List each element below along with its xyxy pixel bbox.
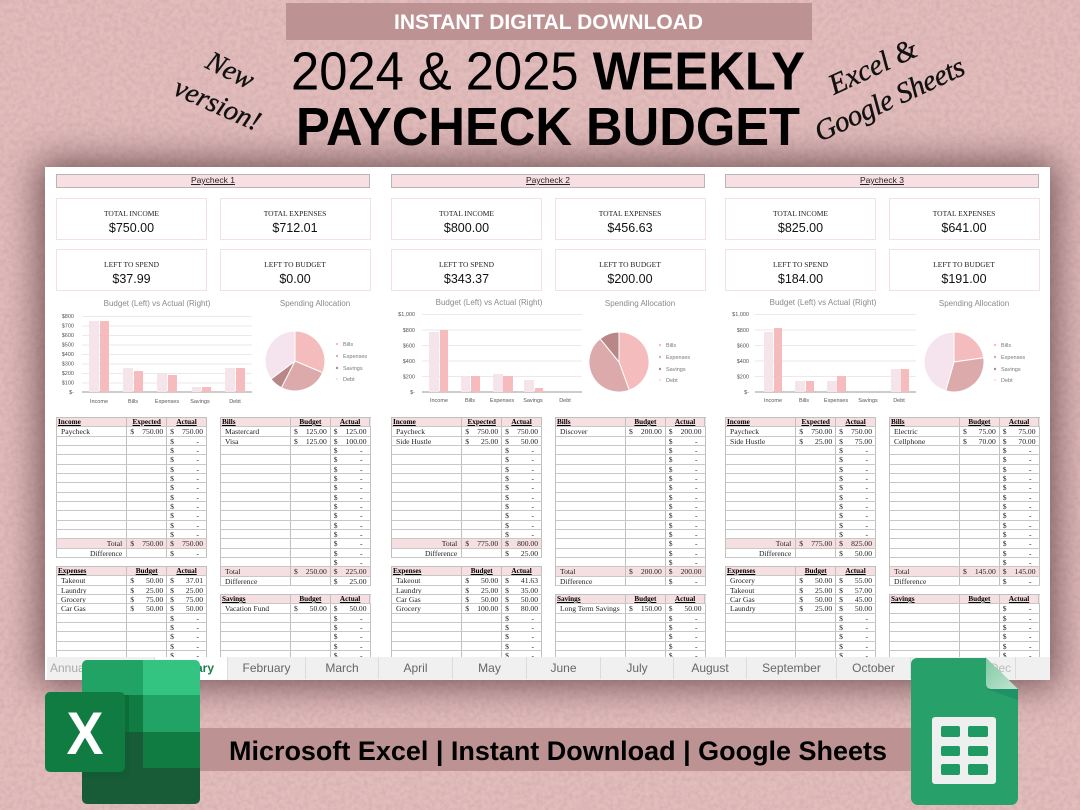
sheet tabs: September xyxy=(762,661,821,675)
charts: budget bars and spending pie: Savings xyxy=(343,366,363,372)
heading: paycheck 2 xyxy=(391,174,705,188)
charts: budget bars and spending pie: Expenses xyxy=(666,355,690,361)
kpi: total income: $750.00 xyxy=(109,221,154,235)
icon: microsoft excel: X xyxy=(66,700,104,767)
footer band: product line: Microsoft Excel | Instant Download | Google Sheets xyxy=(229,736,887,766)
charts: budget bars and spending pie: $600 xyxy=(62,333,74,339)
icon: microsoft excel xyxy=(45,660,200,804)
table: bills xyxy=(220,417,370,586)
charts: budget bars and spending pie: $- xyxy=(744,390,749,396)
table: income: Actual xyxy=(511,418,532,426)
table: savings xyxy=(889,594,1040,660)
charts: budget bars and spending pie: Debt xyxy=(1001,378,1013,384)
charts: budget bars and spending pie: Savings xyxy=(523,398,543,404)
table: savings xyxy=(555,594,706,660)
sheet tabs: March xyxy=(325,661,359,675)
charts: budget bars and spending pie: Budget (Left) vs Actual (Right) xyxy=(436,298,543,307)
table: expenses: Budget xyxy=(471,567,493,575)
table: savings: Actual xyxy=(1009,595,1029,603)
sheet tabs xyxy=(47,657,1050,680)
panel: paycheck 1 xyxy=(56,174,371,657)
kpi: total income xyxy=(56,198,207,240)
table: expenses: Actual xyxy=(511,567,532,575)
callout: new version: New xyxy=(200,45,260,96)
charts: budget bars and spending pie: $600 xyxy=(403,344,415,350)
kpi: left to budget: LEFT TO BUDGET xyxy=(264,260,326,269)
charts: budget bars and spending pie: $- xyxy=(410,390,415,396)
table: expenses xyxy=(56,566,207,660)
table: bills: Bills xyxy=(222,418,236,426)
table: bills: Budget xyxy=(634,418,656,426)
charts: budget bars and spending pie: $600 xyxy=(737,344,749,350)
table: savings: Actual xyxy=(340,595,360,603)
kpi: total expenses xyxy=(220,198,370,240)
table: bills: Actual xyxy=(340,418,360,426)
kpi: left to spend: $184.00 xyxy=(778,272,823,286)
heading: paycheck 3: Paycheck 3 xyxy=(860,175,904,185)
charts: budget bars and spending pie: $200 xyxy=(403,374,415,380)
charts: budget bars and spending pie: $800 xyxy=(62,314,74,320)
table: income xyxy=(56,417,207,558)
table: savings: Budget xyxy=(968,595,990,603)
charts: budget bars and spending pie: $400 xyxy=(62,352,74,358)
charts: budget bars and spending pie: Budget (Left) vs Actual (Right) xyxy=(770,298,877,307)
table: savings: Budget xyxy=(299,595,321,603)
sheet tabs: July xyxy=(626,661,648,675)
table: expenses: Expenses xyxy=(58,567,86,575)
charts: budget bars and spending pie: $300 xyxy=(62,362,74,368)
kpi: total income xyxy=(391,198,542,240)
charts: budget bars and spending pie: $800 xyxy=(403,328,415,334)
table: expenses: Actual xyxy=(845,567,866,575)
charts: budget bars and spending pie xyxy=(62,299,367,405)
table: savings: Budget xyxy=(634,595,656,603)
charts: budget bars and spending pie: Bills xyxy=(343,342,353,348)
heading: paycheck 1: Paycheck 1 xyxy=(191,175,235,185)
table: income xyxy=(391,417,542,558)
kpi: left to spend: LEFT TO SPEND xyxy=(104,260,159,269)
table: income: Actual xyxy=(176,418,197,426)
table: income: Income xyxy=(727,418,750,426)
charts: budget bars and spending pie: Budget (Left) vs Actual (Right) xyxy=(104,299,211,308)
icon: google sheets xyxy=(911,658,1018,805)
spreadsheet sheet background xyxy=(45,167,1050,680)
table: expenses: Expenses xyxy=(393,567,421,575)
table: income: Actual xyxy=(845,418,866,426)
panel: paycheck 3 xyxy=(725,174,1040,657)
charts: budget bars and spending pie: Debt xyxy=(559,398,571,404)
charts: budget bars and spending pie: $800 xyxy=(737,328,749,334)
table: expenses: Expenses xyxy=(727,567,755,575)
table: savings: Savings xyxy=(891,595,915,603)
heading: paycheck 2: Paycheck 2 xyxy=(526,175,570,185)
charts: budget bars and spending pie: Bills xyxy=(128,399,138,405)
charts: budget bars and spending pie: Spending Allocation xyxy=(605,299,675,308)
charts: budget bars and spending pie: Debt xyxy=(229,399,241,405)
table: savings: Actual xyxy=(675,595,695,603)
charts: budget bars and spending pie: Bills xyxy=(666,343,676,349)
title xyxy=(291,44,805,152)
table: savings: Savings xyxy=(222,595,246,603)
kpi: total expenses: $456.63 xyxy=(607,221,653,235)
sheet tabs: Dec xyxy=(990,661,1011,675)
kpi: left to spend: LEFT TO SPEND xyxy=(773,260,828,269)
kpi: left to spend: LEFT TO SPEND xyxy=(439,260,494,269)
kpi: total expenses: $641.00 xyxy=(941,221,987,235)
callout: excel and google sheets: Google Sheets xyxy=(809,51,970,148)
banner: instant digital download: INSTANT DIGITAL DOWNLOAD xyxy=(394,10,703,34)
heading: paycheck 3 xyxy=(725,174,1039,188)
charts: budget bars and spending pie: Savings xyxy=(666,367,686,373)
kpi: left to budget xyxy=(554,249,706,291)
charts: budget bars and spending pie: $100 xyxy=(62,380,74,386)
charts: budget bars and spending pie: Expenses xyxy=(155,399,179,405)
kpi: left to budget: $0.00 xyxy=(279,272,311,286)
sheet tabs: February xyxy=(242,661,291,675)
kpi: left to budget: LEFT TO BUDGET xyxy=(933,260,995,269)
charts: budget bars and spending pie: Expenses xyxy=(490,398,514,404)
charts: budget bars and spending pie: $400 xyxy=(737,359,749,365)
table: bills: Actual xyxy=(1009,418,1029,426)
kpi: total expenses: TOTAL EXPENSES xyxy=(933,209,995,218)
kpi: left to spend xyxy=(725,249,876,291)
banner: instant digital download xyxy=(286,3,812,40)
table: expenses: Budget xyxy=(805,567,827,575)
kpi: left to spend xyxy=(56,249,207,291)
charts: budget bars and spending pie: $200 xyxy=(737,374,749,380)
table: bills xyxy=(889,417,1040,586)
callout: new version: version! xyxy=(169,72,266,138)
sheet tabs: August xyxy=(691,661,729,675)
charts: budget bars and spending pie: $700 xyxy=(62,324,74,330)
charts: budget bars and spending pie: Savings xyxy=(858,398,878,404)
table: savings xyxy=(220,594,370,660)
sheet tabs: November xyxy=(920,661,976,675)
table: income: Expected xyxy=(468,418,496,426)
charts: budget bars and spending pie xyxy=(398,298,690,404)
charts: budget bars and spending pie: $1,000 xyxy=(732,312,749,318)
charts: budget bars and spending pie: $1,000 xyxy=(398,312,415,318)
charts: budget bars and spending pie: Bills xyxy=(1001,343,1011,349)
kpi: total expenses: TOTAL EXPENSES xyxy=(599,209,661,218)
table: savings: Savings xyxy=(557,595,581,603)
charts: budget bars and spending pie: Income xyxy=(430,398,448,404)
kpi: total expenses: TOTAL EXPENSES xyxy=(264,209,326,218)
kpi: left to budget xyxy=(888,249,1040,291)
kpi: left to spend: $37.99 xyxy=(112,272,151,286)
charts: budget bars and spending pie: Spending Allocation xyxy=(939,299,1009,308)
charts: budget bars and spending pie: Bills xyxy=(799,398,809,404)
table: bills: Budget xyxy=(968,418,990,426)
table: bills: Bills xyxy=(557,418,571,426)
charts: budget bars and spending pie: Expenses xyxy=(1001,355,1025,361)
charts: budget bars and spending pie: Debt xyxy=(666,378,678,384)
sheet tabs: April xyxy=(403,661,428,675)
charts: budget bars and spending pie: $- xyxy=(69,390,74,396)
kpi: total expenses xyxy=(888,198,1040,240)
table: income: Income xyxy=(58,418,81,426)
charts: budget bars and spending pie: Income xyxy=(90,399,108,405)
table: bills xyxy=(555,417,706,586)
table: expenses xyxy=(725,566,876,660)
charts: budget bars and spending pie: Spending Allocation xyxy=(280,299,350,308)
heading: paycheck 1 xyxy=(56,174,370,188)
table: expenses: Budget xyxy=(136,567,158,575)
charts: budget bars and spending pie: Debt xyxy=(343,377,355,383)
kpi: left to budget: $191.00 xyxy=(941,272,987,286)
table: income: Expected xyxy=(132,418,161,426)
kpi: total income: TOTAL INCOME xyxy=(104,209,159,218)
sheet tabs: May xyxy=(478,661,501,675)
sheet tabs: October xyxy=(852,661,895,675)
charts: budget bars and spending pie: Bills xyxy=(465,398,475,404)
kpi: total income: $825.00 xyxy=(778,221,823,235)
charts: budget bars and spending pie: $500 xyxy=(62,342,74,348)
panel: paycheck 2 xyxy=(391,174,706,657)
kpi: left to budget: LEFT TO BUDGET xyxy=(599,260,661,269)
kpi: left to budget: $200.00 xyxy=(607,272,653,286)
kpi: total income xyxy=(725,198,876,240)
table: income: Expected xyxy=(802,418,830,426)
kpi: left to spend xyxy=(391,249,542,291)
kpi: total income: TOTAL INCOME xyxy=(439,209,494,218)
charts: budget bars and spending pie: Savings xyxy=(190,399,210,405)
charts: budget bars and spending pie: Expenses xyxy=(824,398,848,404)
charts: budget bars and spending pie: Expenses xyxy=(343,354,367,360)
charts: budget bars and spending pie: $400 xyxy=(403,359,415,365)
table: expenses xyxy=(391,566,542,660)
kpi: total expenses: $712.01 xyxy=(272,221,318,235)
kpi: total expenses xyxy=(554,198,706,240)
charts: budget bars and spending pie: Savings xyxy=(1001,367,1021,373)
kpi: total income: $800.00 xyxy=(444,221,489,235)
table: income: Income xyxy=(393,418,416,426)
footer band: product line xyxy=(200,728,911,771)
charts: budget bars and spending pie: Income xyxy=(764,398,782,404)
kpi: left to spend: $343.37 xyxy=(444,272,489,286)
charts: budget bars and spending pie xyxy=(732,298,1025,404)
table: bills: Bills xyxy=(891,418,905,426)
sheet tabs: January xyxy=(168,661,214,675)
sheet tabs: June xyxy=(550,661,577,675)
charts: budget bars and spending pie: Debt xyxy=(893,398,905,404)
table: bills: Budget xyxy=(299,418,321,426)
sheet tabs: Annual xyxy=(50,661,87,675)
table: bills: Actual xyxy=(675,418,695,426)
kpi: total income: TOTAL INCOME xyxy=(773,209,828,218)
table: expenses: Actual xyxy=(176,567,197,575)
table: income xyxy=(725,417,876,558)
charts: budget bars and spending pie: $200 xyxy=(62,371,74,377)
kpi: left to budget xyxy=(220,249,370,291)
